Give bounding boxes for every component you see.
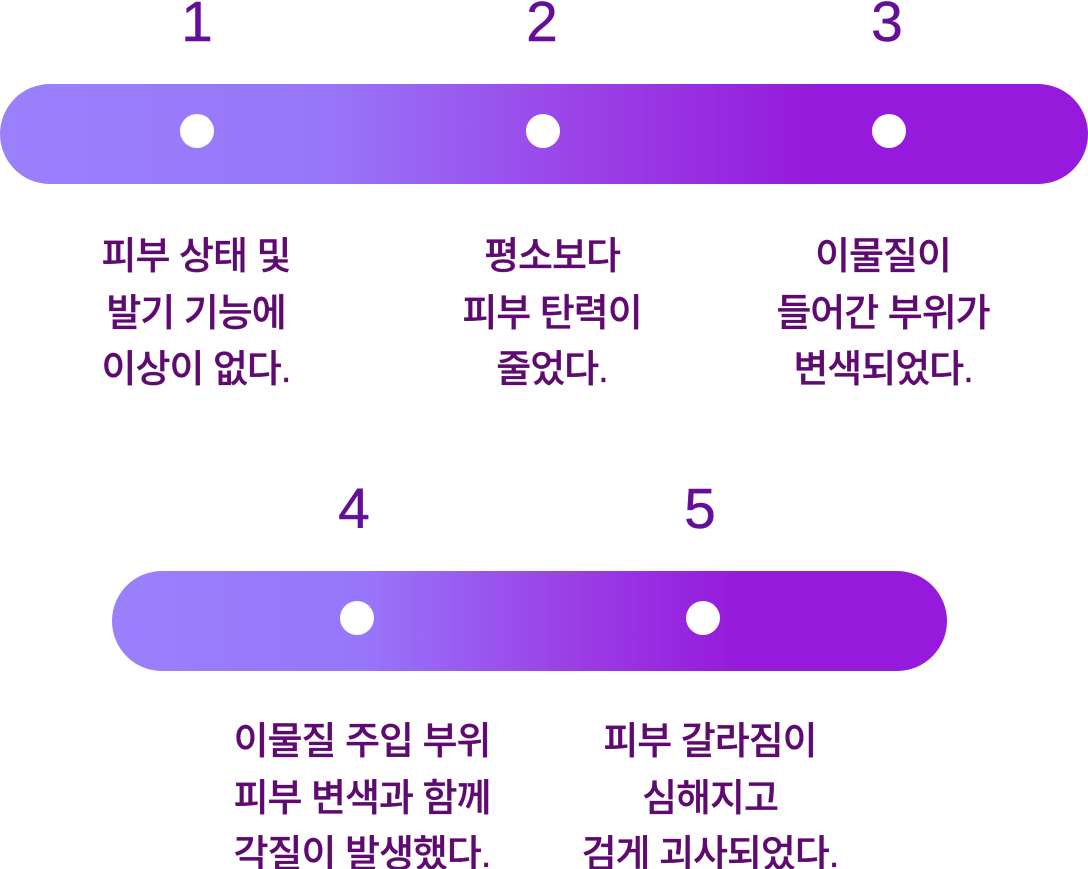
text block: step 2 bbox=[462, 236, 642, 391]
marker dot 2 bbox=[526, 114, 560, 148]
text block: step 5: 심해지고 bbox=[642, 778, 778, 820]
gradient bar: top bbox=[0, 84, 1088, 184]
text block: step 4 bbox=[234, 721, 490, 869]
gradient bar: bottom bbox=[112, 571, 947, 671]
text block: step 5 bbox=[582, 721, 838, 869]
marker dot 3 bbox=[872, 114, 906, 148]
text block: step 1: 피부 상태 및 bbox=[102, 236, 290, 278]
text block: step 4: 피부 변색과 함께 bbox=[234, 778, 490, 820]
text block: step 3 bbox=[776, 236, 990, 391]
text block: step 5: 피부 갈라짐이 bbox=[603, 721, 817, 763]
text block: step 2: 평소보다 bbox=[484, 236, 620, 278]
text block: step 1 bbox=[102, 236, 290, 391]
text block: step 1: 발기 기능에 bbox=[106, 292, 286, 334]
text block: step 3: 이물질이 bbox=[815, 236, 951, 278]
text block: step 2: 줄었다. bbox=[496, 349, 608, 391]
step number 4: 4 bbox=[338, 477, 370, 541]
text block: step 3: 들어간 부위가 bbox=[776, 292, 990, 334]
step number 5: 5 bbox=[684, 477, 716, 541]
marker dot 5 bbox=[686, 601, 720, 635]
marker dot 4 bbox=[340, 601, 374, 635]
text block: step 1: 이상이 없다. bbox=[102, 349, 290, 391]
text block: step 2: 피부 탄력이 bbox=[462, 292, 642, 334]
text block: step 4: 이물질 주입 부위 bbox=[234, 721, 490, 763]
marker dot 1 bbox=[180, 114, 214, 148]
text block: step 3: 변색되었다. bbox=[793, 349, 973, 391]
